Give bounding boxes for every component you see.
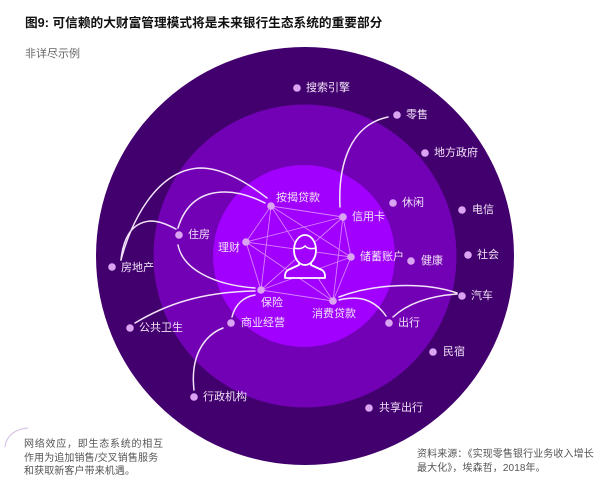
nodes: core services: 信用卡 [352, 210, 385, 223]
nodes: outer ring: 房地产 [121, 260, 154, 274]
nodes: outer ring [108, 80, 499, 414]
nodes: outer ring: 零售 [406, 107, 428, 121]
nodes: outer ring: 地方政府 [434, 145, 478, 159]
note text: 网络效应，即生态系统的相互 [24, 437, 164, 450]
nodes: middle ring: 出行 [398, 315, 420, 329]
ecosystem diagram [96, 47, 514, 465]
outer ring [96, 47, 514, 465]
inner ring [213, 165, 395, 347]
nodes: middle ring: 住房 [188, 227, 210, 241]
nodes: middle ring: 休闲 [402, 195, 424, 209]
network lines [246, 206, 351, 301]
nodes: outer ring: 电信 [472, 203, 494, 216]
note text: 作用为追加销售/交叉销售服务 [24, 451, 158, 464]
title: 图9: 可信赖的大财富管理模式将是未来银行生态系统的重要部分 [25, 15, 383, 30]
source note: 资料来源：《实现零售银行业务收入增长 [417, 447, 594, 460]
nodes: middle ring: 健康 [421, 253, 443, 267]
nodes: outer ring: 共享出行 [379, 400, 423, 414]
nodes: middle ring [175, 195, 443, 329]
middle ring [154, 104, 456, 408]
nodes: core services: 储蓄账户 [360, 249, 404, 263]
source note: 最大化》，埃森哲，2018年。 [417, 461, 546, 474]
network effect note [5, 428, 164, 477]
nodes: outer ring: 社会 [477, 247, 499, 261]
nodes: core services: 理财 [218, 240, 240, 254]
nodes: middle ring: 商业经营 [241, 315, 285, 329]
connection curves [121, 117, 457, 390]
nodes: core services: 消费贷款 [312, 306, 356, 320]
nodes: outer ring: 公共卫生 [139, 320, 183, 334]
nodes: outer ring: 民宿 [443, 344, 465, 358]
nodes: core services: 按揭贷款 [276, 190, 320, 204]
nodes: outer ring: 行政机构 [203, 389, 247, 403]
nodes: outer ring: 搜索引擎 [306, 80, 350, 94]
icon: person [285, 235, 325, 278]
subtitle: 非详尽示例 [25, 46, 80, 60]
nodes: core services: 保险 [261, 295, 283, 309]
nodes: core services [218, 190, 404, 320]
nodes: outer ring: 汽车 [471, 288, 493, 302]
note accent curve [5, 428, 28, 447]
note text: 和获取新客户带来机遇。 [24, 464, 135, 477]
